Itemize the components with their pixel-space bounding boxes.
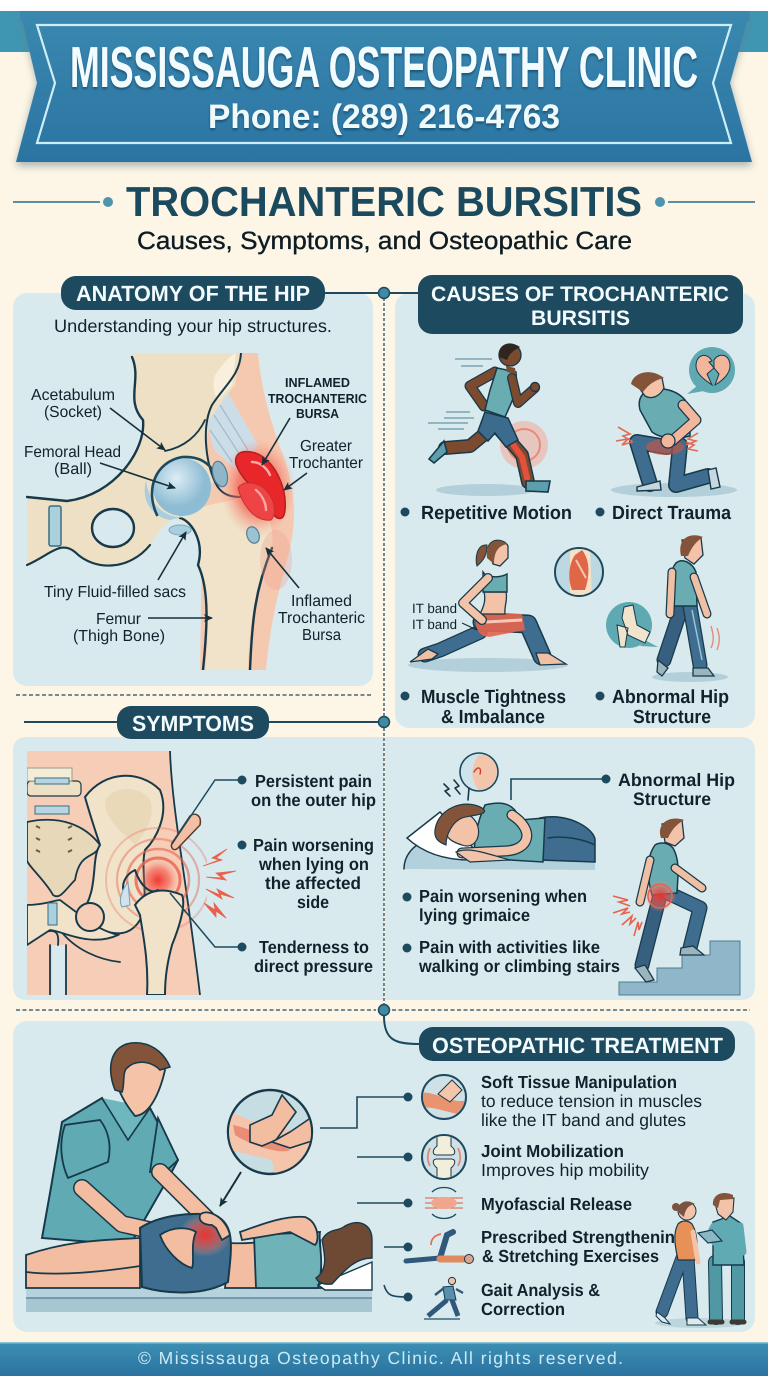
panel: treatment background — [13, 1021, 755, 1332]
heading: osteopathic treatment: OSTEOPATHIC TREATMENT — [432, 1033, 724, 1058]
anatomy labels: Greater — [300, 438, 353, 455]
heading: osteopathic treatment — [419, 1027, 735, 1061]
text: symptom list: direct pressure — [254, 956, 373, 976]
anatomy labels: TROCHANTERIC — [268, 391, 368, 406]
text: symptom list: when lying on — [258, 854, 369, 874]
anatomy labels: Trochanteric — [278, 610, 365, 627]
icon: gait — [424, 1277, 463, 1319]
zoom inset — [228, 1090, 312, 1174]
subtitle: Causes, Symptoms, and Osteopathic Care — [137, 227, 632, 255]
text: symptom list: on the outer hip — [251, 790, 376, 810]
anatomy labels: Inflamed — [291, 593, 352, 610]
heading: causes: BURSITIS — [531, 307, 630, 330]
figure: walking patient — [656, 1201, 706, 1325]
text: IT band labels — [412, 601, 457, 632]
text: symptom list: Tenderness to — [259, 937, 369, 957]
icon: joint — [422, 1134, 466, 1180]
panel: causes background — [395, 293, 755, 728]
bullet label: abnormal hip structure — [596, 687, 729, 728]
anatomy labels: BURSA — [296, 406, 340, 421]
text: treatment list: Myofascial Release — [481, 1194, 632, 1214]
bullet label: abnormal hip structure: Abnormal Hip — [612, 687, 729, 708]
figure: direct trauma — [611, 347, 737, 497]
anatomy labels: Bursa — [302, 627, 341, 644]
anatomy arrows — [100, 408, 307, 618]
text: symptom list — [251, 771, 376, 976]
text: symptom list: the affected — [265, 873, 361, 893]
text: abnormal hip structure — [618, 770, 735, 809]
illustration: pelvis with pain — [27, 751, 210, 995]
header banner — [0, 11, 768, 166]
figure: runner — [428, 344, 550, 496]
text: symptom list: side — [297, 892, 329, 912]
text: lying bullet — [402, 886, 587, 925]
text: treatment list — [481, 1072, 702, 1319]
panel: symptoms background — [13, 737, 384, 1000]
leader lines: symptoms — [170, 776, 246, 952]
text: treatment list: to reduce tension in muscles — [481, 1091, 702, 1111]
timeline connectors — [24, 288, 419, 1044]
text: treatment list: Improves hip mobility — [481, 1160, 649, 1180]
anatomy labels: Femur — [96, 611, 142, 628]
figure: patient and practitioner — [655, 1193, 745, 1328]
illustration: hip anatomy — [27, 353, 296, 670]
icon: stretching exercise — [406, 1232, 474, 1264]
anatomy labels: Femoral Head — [24, 444, 121, 461]
icon: myofascial — [425, 1188, 463, 1218]
figure: abnormal hip walker — [606, 535, 728, 682]
arrow: inset to hip — [220, 1172, 241, 1206]
bullet label: abnormal hip structure: Structure — [633, 707, 711, 728]
text: treatment list: Joint Mobilization — [481, 1141, 624, 1161]
text: treatment list: & Stretching Exercises — [482, 1246, 659, 1266]
illustration: therapist treating patient — [26, 1043, 372, 1312]
anatomy labels: Tiny Fluid-filled sacs — [44, 584, 186, 601]
anatomy labels: Trochanter — [289, 455, 364, 472]
text: abnormal hip structure: Structure — [633, 789, 711, 809]
text: treatment list: Gait Analysis & — [481, 1280, 600, 1300]
bullet label: repetitive motion: Repetitive Motion — [421, 503, 572, 524]
therapist torso — [42, 1098, 178, 1245]
text: treatment list: like the IT band and glutes — [481, 1110, 686, 1130]
pain zigzags — [203, 849, 236, 918]
heading: causes — [418, 275, 743, 334]
heading: symptoms — [117, 706, 269, 739]
heading: symptoms: SYMPTOMS — [132, 711, 254, 736]
heading: anatomy of the hip — [61, 276, 325, 310]
text: lying bullet: lying grimaice — [419, 905, 530, 925]
text: anatomy intro: Understanding your hip structures. — [54, 316, 332, 336]
text: activities bullet — [402, 937, 620, 976]
bullet label: muscle tightness — [400, 687, 566, 728]
icon: soft tissue — [420, 1075, 470, 1119]
figure: practitioner — [698, 1193, 744, 1322]
figure: lunge with IT band — [408, 540, 603, 672]
text: treatment list: Prescribed Strengthenin — [481, 1227, 675, 1247]
figure: man climbing stairs — [613, 819, 740, 995]
heading: causes: CAUSES OF TROCHANTERIC — [431, 283, 729, 306]
footer bar — [0, 1342, 768, 1376]
panel: symptoms detail background — [385, 737, 755, 1000]
heading: anatomy of the hip: ANATOMY OF THE HIP — [76, 281, 310, 306]
text: lying bullet: Pain worsening when — [419, 886, 587, 906]
leader: abnormal hip structure — [511, 774, 610, 800]
panel: anatomy background — [13, 293, 373, 686]
anatomy labels: (Thigh Bone) — [73, 628, 165, 645]
main title: TROCHANTERIC BURSITIS — [126, 178, 642, 225]
text: IT band labels: IT band — [412, 601, 457, 616]
bullet label: direct trauma: Direct Trauma — [612, 503, 731, 524]
figure: woman lying on side — [404, 753, 595, 870]
text: treatment list: Soft Tissue Manipulation — [481, 1072, 677, 1092]
footer bar: © Mississauga Osteopathy Clinic. All rights reserved. — [138, 1348, 624, 1368]
phone number: Phone: (289) 216-4763 — [208, 98, 560, 136]
text: symptom list: Persistent pain — [255, 771, 372, 791]
anatomy labels: Acetabulum — [31, 387, 115, 404]
anatomy labels: (Socket) — [44, 404, 102, 421]
bullet label: muscle tightness: Muscle Tightness — [421, 687, 566, 708]
anatomy labels: (Ball) — [54, 461, 92, 478]
text: treatment list: Correction — [481, 1299, 565, 1319]
anatomy labels: INFLAMED — [285, 375, 350, 390]
patient — [26, 1238, 140, 1288]
text: abnormal hip structure: Abnormal Hip — [618, 770, 735, 790]
text: symptom list: Pain worsening — [253, 835, 374, 855]
text: IT band labels: IT band — [412, 617, 457, 632]
treatment connectors — [320, 1092, 412, 1302]
text: activities bullet: walking or climbing stairs — [418, 956, 620, 976]
anatomy labels — [24, 375, 368, 645]
text: activities bullet: Pain with activities like — [419, 937, 600, 957]
main title — [13, 178, 755, 255]
bullet label: muscle tightness: & Imbalance — [441, 707, 545, 728]
